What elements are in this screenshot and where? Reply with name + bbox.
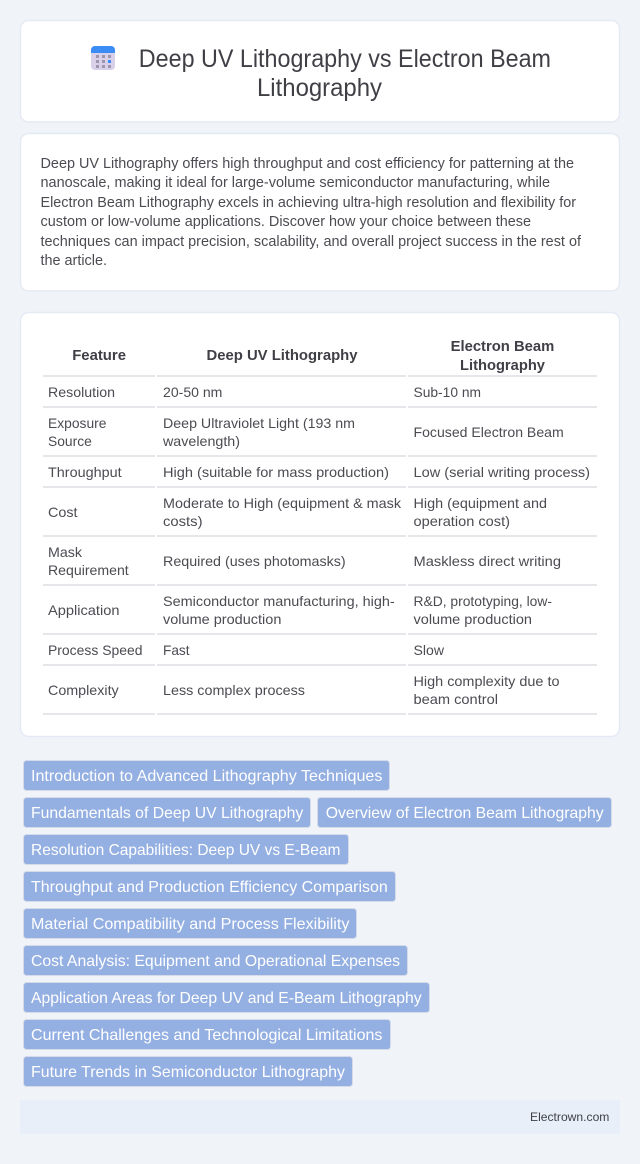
table header row: Deep UV Lithography [206,347,358,364]
row: exposure source: Source [48,433,92,449]
row: throughput [48,464,590,480]
row: mask requirement: Requirement [48,562,129,578]
row: mask requirement: Required (uses photomasks) [163,553,346,569]
row: mask requirement: Maskless direct writing [414,553,561,569]
row: throughput: Throughput [48,464,122,480]
row: cost: High (equipment and [414,495,547,511]
row: cost: operation cost) [414,513,510,529]
footer [20,1100,620,1134]
panel: comparison table [20,312,620,736]
row: exposure source: Exposure [48,415,107,431]
panel: introduction text: techniques can impact precision, scalability, and overall project success in the rest of [40,234,582,250]
table header row [72,338,554,374]
row: throughput: High (suitable for mass production) [163,464,389,480]
tag: material: Material Compatibility and Process Flexibility [31,916,349,933]
row: process speed: Fast [163,642,190,658]
title: Deep UV Lithography vs Electron Beam [139,45,551,73]
tag: resolution [24,834,348,864]
tag: throughput [24,872,396,902]
icon: calendar grid [91,46,115,70]
row: complexity: High complexity due to [414,673,560,689]
row: exposure source: Focused Electron Beam [414,424,564,440]
tag: future trends [24,1056,352,1086]
title: Lithography [257,74,382,102]
row: application: volume production [163,611,281,627]
row: complexity: Complexity [48,682,119,698]
row: application: R&D, prototyping, low- [414,593,552,609]
row: cost: costs) [163,513,202,529]
row: process speed [48,642,445,658]
footer: Electrown.com [530,1110,609,1124]
tag: introduction: Introduction to Advanced Lithography Techniques [31,768,382,785]
row: exposure source: wavelength) [162,433,240,449]
panel: introduction text [20,134,620,291]
tag: introduction [24,760,390,790]
table header row: Feature [72,347,126,364]
row: throughput: Low (serial writing process) [414,464,590,480]
row: mask requirement [48,544,561,578]
row: resolution: Sub-10 nm [414,384,481,400]
row: application: Semiconductor manufacturing, high- [163,593,395,609]
row: complexity: beam control [414,691,498,707]
row: exposure source: Deep Ultraviolet Light (193 nm [163,415,355,431]
panel: topic tags [24,760,612,1086]
row: resolution: 20-50 nm [163,384,222,400]
row: application: Application [48,602,120,618]
panel: introduction text: custom or low-volume applications. Discover how your choice between these [40,214,531,230]
row: exposure source [48,415,564,449]
tag: application [24,982,430,1012]
row: resolution: Resolution [48,384,115,400]
panel: introduction text: nanoscale, making it ideal for large-volume semiconductor manufacturing, while [40,175,550,191]
table header row: Lithography [460,357,546,374]
row: cost: Moderate to High (equipment & mask [163,495,402,511]
row: application: volume production [414,611,532,627]
tag: challenges: Current Challenges and Technological Limitations [31,1027,382,1044]
title [139,45,551,102]
tag: application: Application Areas for Deep UV and E-Beam Lithography [31,990,422,1007]
panel: introduction text: Deep UV Lithography offers high throughput and cost efficiency for patterning at the [40,156,574,172]
row: complexity [48,673,560,707]
row: mask requirement: Mask [48,544,83,560]
table header row: Electron Beam [451,338,554,355]
panel: introduction text: the article. [40,253,107,269]
row: cost: Cost [48,504,78,520]
tag: fundamentals: Fundamentals of Deep UV Lithography [31,805,303,822]
row: cost [48,495,547,529]
tag: future trends: Future Trends in Semiconductor Lithography [31,1064,345,1081]
row: application [48,593,552,627]
row: complexity: Less complex process [163,682,305,698]
panel: introduction text: Electron Beam Lithography excels in achieving ultra-high resolution and flexibility for [40,195,576,211]
tag: overview: Overview of Electron Beam Lithography [326,805,604,822]
tag: overview [318,798,612,828]
tag: resolution: Resolution Capabilities: Deep UV vs E-Beam [31,842,340,859]
tag: throughput: Throughput and Production Efficiency Comparison [31,879,388,896]
row: resolution [48,384,481,400]
tag: challenges [24,1020,390,1050]
row: process speed: Process Speed [48,642,142,658]
tag: material [24,908,356,938]
tag: fundamentals [24,798,310,828]
panel: header [20,20,620,122]
tag: cost [24,946,408,976]
row: process speed: Slow [414,642,445,658]
tag: cost: Cost Analysis: Equipment and Operational Expenses [31,953,400,970]
